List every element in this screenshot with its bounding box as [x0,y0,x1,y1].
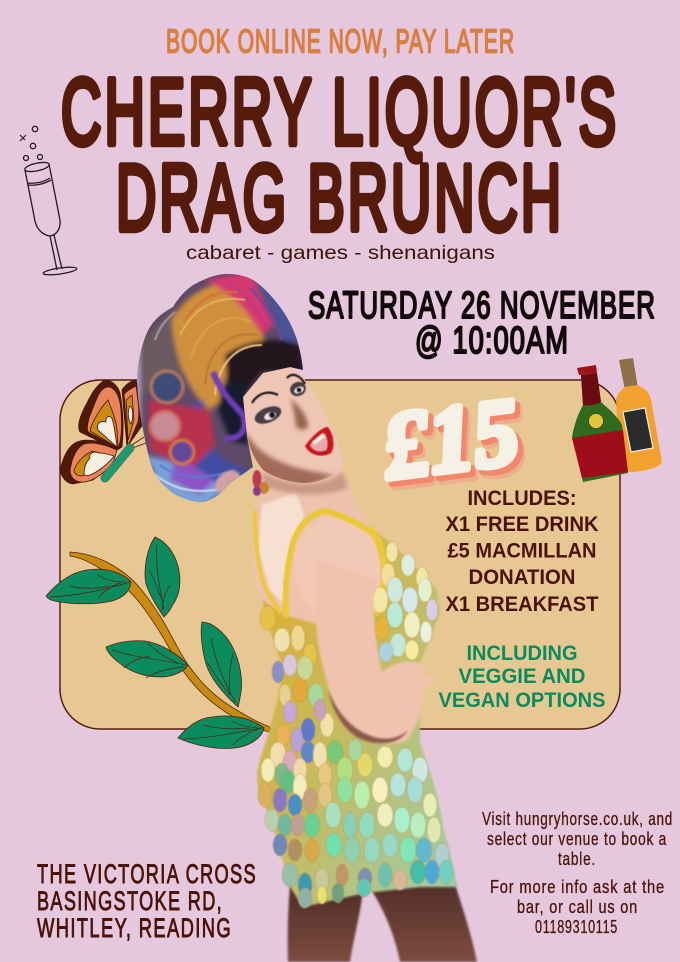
legs [288,875,477,962]
dietary options: INCLUDING [466,641,578,665]
orange bottle [616,358,662,472]
venue address [37,859,257,943]
price: £15 [377,378,524,499]
panel: price and details [60,380,620,729]
leaf 2 [145,537,180,617]
leaf 5 [178,716,264,749]
venue address: WHITLEY, READING [37,913,232,943]
hair [137,274,303,502]
dress straps [255,511,384,615]
includes list: DONATION [468,565,576,589]
includes list: X1 BREAKFAST [446,592,598,616]
price: £15 [384,386,531,508]
includes list: INCLUDES: [468,486,576,510]
icon: champagne glass [20,126,77,276]
icon: butterfly [60,380,146,484]
includes list [446,486,599,616]
back and shoulder [252,470,390,650]
leaf 4 [201,622,242,707]
subtitle: cabaret - games - shenanigans [186,242,495,264]
neck shadow [262,472,348,495]
arm [315,560,438,744]
booking information [482,809,673,937]
arm shadow [328,690,408,743]
date and time: @ 10:00AM [415,320,569,362]
booking information: table. [558,849,596,869]
green bottle [572,365,628,482]
includes list: X1 FREE DRINK [446,512,599,536]
icon: bottles [572,358,662,482]
dietary options: VEGGIE AND [458,664,586,688]
includes list: £5 MACMILLAN [448,538,596,562]
venue address: THE VICTORIA CROSS [37,859,257,889]
dietary options [438,641,606,712]
leaf 1 [46,569,131,604]
venue address: BASINGSTOKE RD, [37,886,223,916]
earring [252,470,269,496]
title [61,59,619,250]
date and time [308,285,656,362]
price: £15 [381,382,529,504]
booking information: 01189310115 [535,917,618,937]
dress body [257,530,457,907]
leaf 3 [106,641,188,678]
sequins [258,542,453,908]
icon: leafy branch [46,537,270,749]
face [243,367,344,483]
booking information: bar, or call us on [517,897,638,917]
dietary options: VEGAN OPTIONS [438,688,606,712]
performer photo [130,270,477,962]
